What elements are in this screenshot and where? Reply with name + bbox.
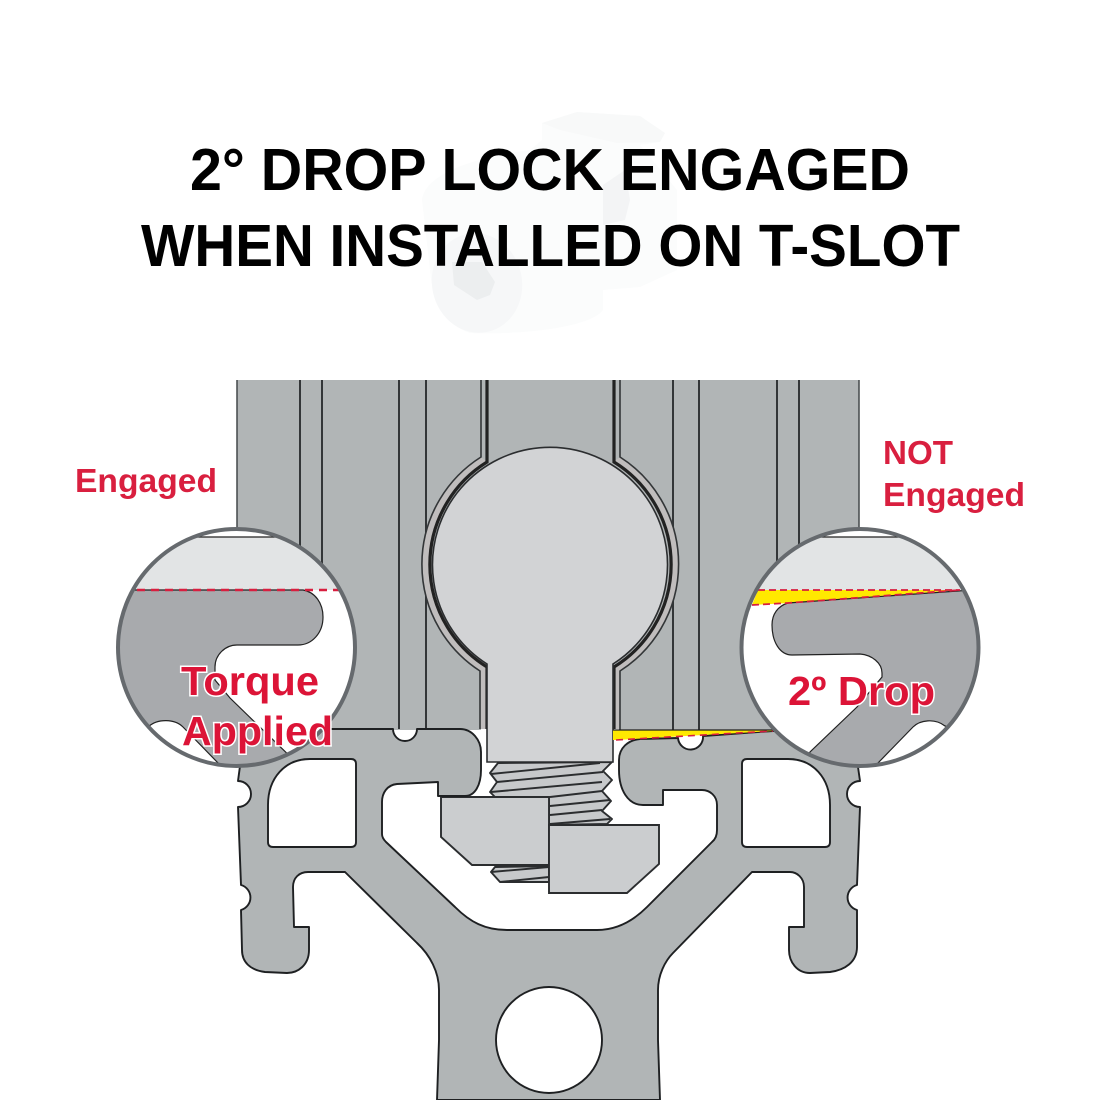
magnifier: not engaged xyxy=(740,529,985,775)
title: 2° DROP LOCK ENGAGED xyxy=(190,137,910,203)
magnifier: engaged xyxy=(116,527,357,768)
upper T-slot extrusion block xyxy=(237,380,859,730)
extrusion right window xyxy=(742,759,830,847)
extrusion left window xyxy=(268,759,356,847)
callout: torque applied: Torque xyxy=(181,658,319,704)
label: not engaged: Engaged xyxy=(883,477,1025,514)
stud ball and neck xyxy=(432,447,668,762)
label: not engaged xyxy=(883,435,1025,514)
yellow 2 degree gap wedge xyxy=(613,730,776,740)
callout: torque applied: Applied xyxy=(182,708,333,754)
title: WHEN INSTALLED ON T-SLOT xyxy=(141,213,960,279)
extrusion centre hole xyxy=(496,987,602,1093)
callout: 2 degree drop: 2º Drop xyxy=(788,668,935,714)
gap below block beside the stud xyxy=(481,729,619,770)
faint product watermark behind title xyxy=(422,112,677,341)
label: not engaged: NOT xyxy=(883,435,954,472)
lower T-slot extrusion profile xyxy=(237,725,860,1100)
screw thread xyxy=(490,762,612,882)
T-nut right half xyxy=(549,825,659,893)
T-nut left half xyxy=(441,797,549,865)
infographic canvas xyxy=(77,148,1023,1100)
label: engaged: Engaged xyxy=(75,463,217,500)
title xyxy=(141,137,960,279)
callout: torque applied xyxy=(181,658,333,754)
